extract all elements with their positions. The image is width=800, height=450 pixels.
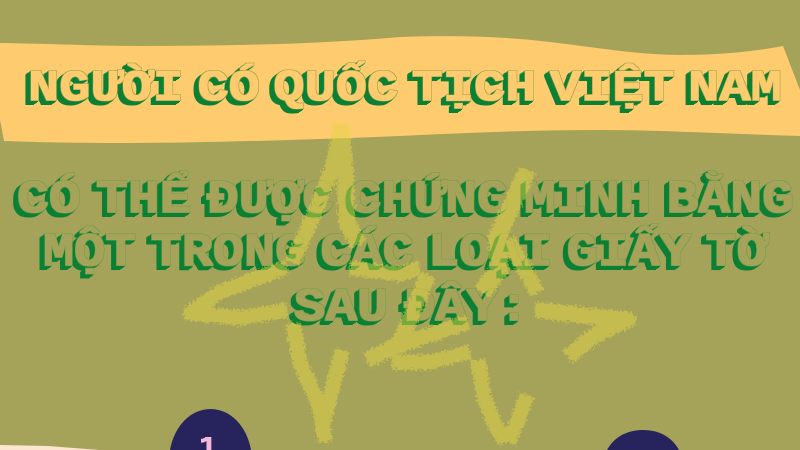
heading line 1: CÓ THỂ ĐƯỢC CHỨNG MINH BẰNG [17,171,794,226]
number badge 1 [170,409,251,450]
banner: yellow ribbon [0,36,800,143]
cream panel: item 1 [0,445,100,450]
heading line 3: SAU ĐÂY: [294,281,530,334]
title: Người có quốc tịch Việt Nam: NGƯỜI CÓ QUỐC TỊCH VIỆT NAM [28,61,782,114]
heading line 2: MỘT TRONG CÁC LOẠI GIẤY TỜ [43,223,769,279]
number badge 2 [607,430,679,450]
